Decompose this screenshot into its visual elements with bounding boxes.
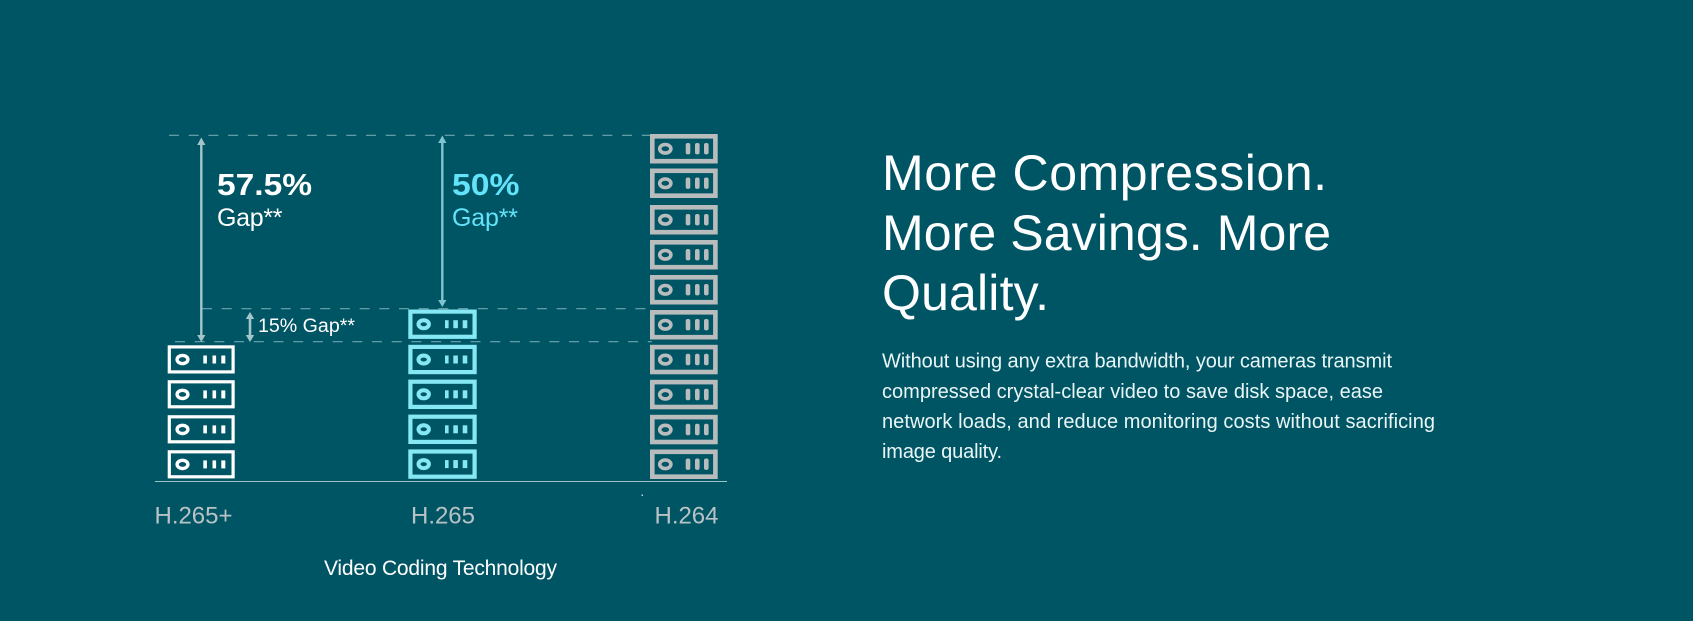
arrow: 50% gap [438,136,446,307]
arrow: 15% gap [246,312,254,342]
heading: Quality. [882,265,1049,321]
chart axis baseline [155,480,727,482]
body text [882,350,1435,463]
body text: network loads, and reduce monitoring costs without sacrificing [882,411,1435,433]
heading: More Compression. [882,145,1327,201]
column: H.265 servers [410,312,475,477]
label: 50% gap: 50% [452,167,520,202]
column: H.265+ servers [169,347,233,477]
arrow: 57.5% gap [197,138,205,342]
body text: Without using any extra bandwidth, your cameras transmit [882,350,1392,372]
heading: More Savings. More [882,205,1331,261]
body text: compressed crystal-clear video to save disk space, ease [882,381,1383,403]
label: 57.5% gap [217,167,312,232]
heading [882,145,1331,321]
label: 15% gap: 15% Gap** [258,315,355,337]
axis label: H.265+: H.265+ [154,502,232,530]
body text: image quality. [882,441,1002,463]
axis label: H.265: H.265 [411,502,475,530]
label: 50% gap [452,167,520,232]
label: 50% gap: Gap** [452,204,518,232]
label: 57.5% gap: Gap** [217,204,283,232]
axis label: H.264: H.264 [654,502,718,530]
axis title: Video Coding Technology [324,557,558,580]
label: 57.5% gap: 57.5% [217,167,312,202]
column: H.264 servers [652,136,715,477]
